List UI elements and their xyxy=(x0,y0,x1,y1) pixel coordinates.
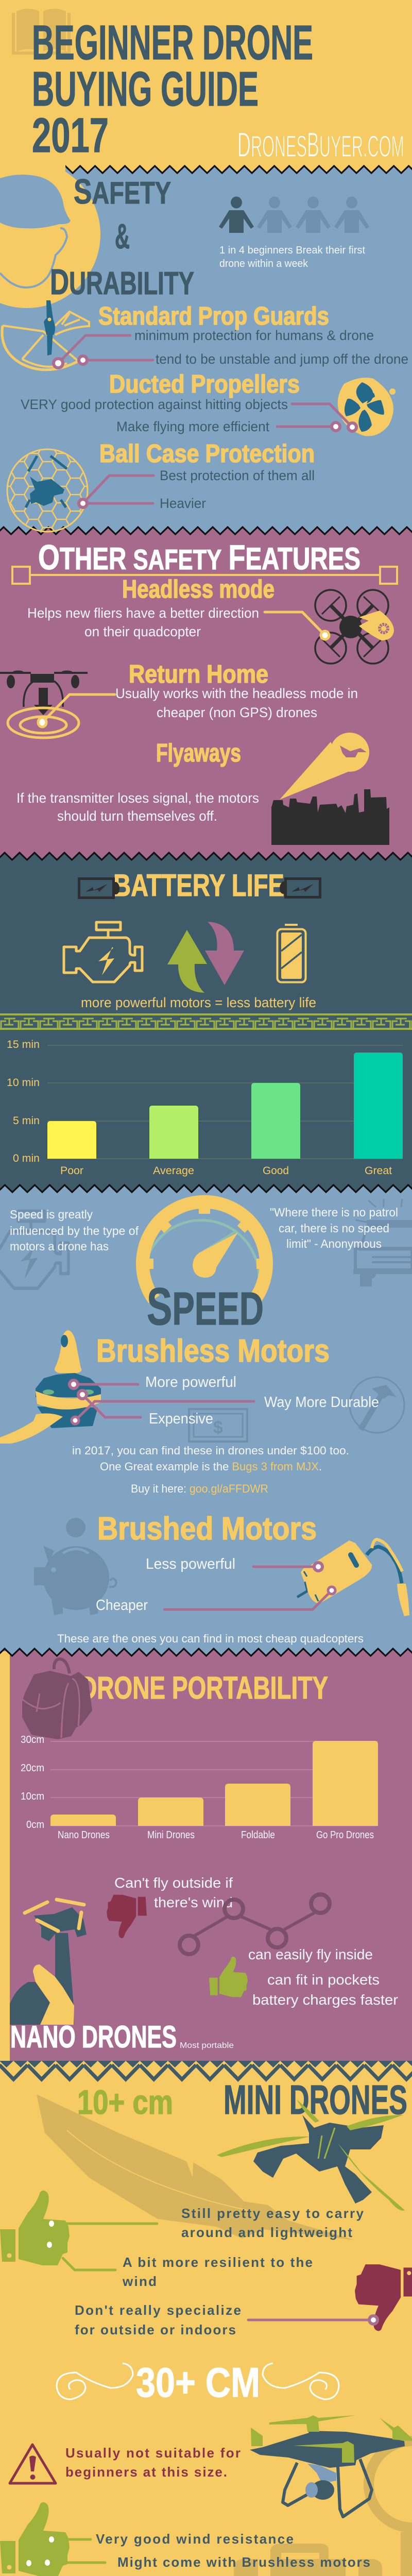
callout: ball heavier: Heavier xyxy=(160,496,206,511)
icon: brushed motor xyxy=(297,1539,409,1616)
callout: easy to carry: around and lightweight xyxy=(181,2225,352,2240)
icon: engine xyxy=(64,922,142,982)
icon: green up arrow xyxy=(167,930,207,993)
callout: not specialized xyxy=(75,2302,377,2337)
icon: thumb up xyxy=(209,1957,248,1997)
callout: resilient to wind: wind xyxy=(122,2274,157,2289)
callout: wind weakness xyxy=(114,1875,233,1910)
callout: expensive: Expensive xyxy=(149,1411,213,1427)
callout: ball heavier xyxy=(79,496,206,511)
callout: way more durable: Way More Durable xyxy=(264,1394,379,1411)
icon: thumb down xyxy=(107,1895,147,1938)
text: warning for beginners: Usually not suitable for xyxy=(65,2445,241,2461)
heading: Ball Case Protection: Ball Case Protection xyxy=(99,440,315,468)
callout: return home text: Usually works with the headless mode in xyxy=(115,686,358,701)
callout: ducted protection xyxy=(21,397,356,431)
heading: Safety & Durability: DURABILITY xyxy=(50,262,194,302)
icon: return home drone with target xyxy=(0,671,88,738)
heading: Brushless Motors: Brushless Motors xyxy=(96,1333,330,1369)
text: beginner statistic: 1 in 4 beginners Break their first xyxy=(219,245,365,256)
callout: ducted efficient: Make flying more efficient xyxy=(116,419,269,434)
icon: helmet head in yellow circle xyxy=(0,161,100,308)
bar: Great xyxy=(354,1053,403,1159)
callout: ball best protection: Best protection of them all xyxy=(160,468,315,483)
icon: faded book xyxy=(12,9,71,55)
icon: nano drone on finger xyxy=(10,1900,87,2025)
section background: other safety (mauve) xyxy=(0,526,412,853)
heading: 30+ CM with swirls xyxy=(57,2360,339,2406)
icon: prop guard xyxy=(2,300,89,370)
bar chart: flight time xyxy=(7,1039,403,1177)
callout: ducted protection: VERY good protection against hitting objects xyxy=(21,397,288,412)
icon: mauve down arrow xyxy=(205,922,244,985)
text: warning for beginners: beginners at this size. xyxy=(65,2464,227,2480)
section background: size classes (yellow) xyxy=(0,2061,412,2576)
heading: Standard Prop Guards: Standard Prop Guards xyxy=(98,302,329,330)
callout: prop guard protection: minimum protection for humans & drone xyxy=(134,328,374,343)
bar: Nano Drones xyxy=(50,1815,116,1826)
heading: Other safety Features: OTHER SAFETY FEATURES xyxy=(38,538,360,577)
text: flyaways description xyxy=(16,790,259,824)
heading: Return Home: Return Home xyxy=(129,660,268,688)
text: speed intro: motors a drone has xyxy=(10,1240,109,1253)
label: 10+ cm: 10+ cm xyxy=(77,2083,173,2121)
callout: wind resistance: Very good wind resistance xyxy=(96,2531,294,2547)
faded icon: feather xyxy=(37,2094,355,2240)
callout: return home text xyxy=(38,686,358,727)
callout: wind weakness: Can't fly outside if xyxy=(114,1875,233,1891)
bar chart: drone size: Nano Drones xyxy=(58,1829,110,1841)
faded icon: line graph xyxy=(180,1894,330,1954)
icon: thumb up (large drone pros) xyxy=(0,2502,70,2576)
text: beginner statistic: drone within a week xyxy=(219,258,308,269)
callout: cheaper xyxy=(96,1587,335,1614)
faded icon: backpack xyxy=(22,1659,92,1739)
faded icon: hammer xyxy=(350,1377,404,1433)
text: Bugs 3 recommendation: One Great example is the Bugs 3 from MJX. xyxy=(100,1460,322,1473)
icon: thumb up (mini pros) xyxy=(0,2191,70,2265)
bar chart: flight time: 5 min xyxy=(13,1115,40,1127)
faded icon: suitcase xyxy=(226,2532,412,2576)
callout: headless mode text: on their quadcopter xyxy=(84,624,201,639)
text: speed intro xyxy=(10,1208,139,1253)
callout: easy to carry xyxy=(67,2206,364,2240)
heading: Nano Drones: NANO DRONES xyxy=(10,2020,177,2054)
text: brushed motors note: These are the ones you can find in most cheap quadcopters xyxy=(57,1632,364,1645)
faded icon: piggy bank xyxy=(34,1518,116,1615)
heading: Safety & Durability: & xyxy=(115,217,130,256)
text: Bugs 3 recommendation xyxy=(72,1444,349,1495)
callout: return home text: cheaper (non GPS) drones xyxy=(157,705,317,720)
callout: resilient to wind: A bit more resilient to the xyxy=(123,2255,313,2270)
icon: battery left xyxy=(79,879,119,897)
text: flyaways description: should turn themselves off. xyxy=(57,808,217,824)
bar chart: flight time: Great xyxy=(365,1165,392,1177)
section background: title (yellow) xyxy=(0,0,412,180)
section background: safety left xyxy=(0,180,65,527)
callout: less powerful xyxy=(146,1556,322,1572)
callout: not specialized: for outside or indoors xyxy=(75,2322,236,2337)
callout: easy to carry: Still pretty easy to carry xyxy=(181,2206,364,2221)
heading: Headless mode: Headless mode xyxy=(122,575,274,603)
text: warning for beginners xyxy=(65,2445,241,2480)
text: speed quote: limit" - Anonymous xyxy=(286,1237,382,1250)
bar chart: drone size: Mini Drones xyxy=(147,1829,195,1841)
bar chart: flight time: 10 min xyxy=(7,1077,40,1089)
title xyxy=(32,15,313,163)
heading: Flyaways: Flyaways xyxy=(156,739,241,767)
bar chart: drone size: Go Pro Drones xyxy=(316,1829,374,1841)
bar chart: drone size: 10cm xyxy=(21,1791,44,1802)
bar: Poor xyxy=(47,1121,96,1159)
yellow stripe: left edge of portability xyxy=(0,1651,10,2061)
text: speed intro: influenced by the type of xyxy=(10,1224,139,1238)
heading: 30+ CM with swirls: 30+ CM xyxy=(136,2360,260,2406)
text: speed intro: Speed is greatly xyxy=(10,1208,93,1221)
callout: headless mode text: Helps new fliers have a better direction xyxy=(27,605,259,621)
icon: brushless motor xyxy=(0,1330,101,1444)
text: speed quote: "Where there is no patrol xyxy=(270,1206,398,1219)
heading: Drone Portability: DRONE PORTABILITY xyxy=(80,1670,328,1705)
title: 2017 xyxy=(32,108,109,163)
heading underline with square ends xyxy=(12,567,397,584)
text: more powerful motors: more powerful motors = less battery life xyxy=(81,995,316,1010)
bar: Foldable xyxy=(225,1784,290,1826)
heading: Battery Life: BATTERY LIFE xyxy=(113,868,284,903)
text: nano pros: battery charges faster xyxy=(252,1992,398,2008)
section background: portability (mauve) xyxy=(0,1648,412,2061)
text: nano pros: can easily fly inside xyxy=(248,1946,373,1962)
faded icon: engine xyxy=(0,1211,68,1289)
text: speed quote: car, there is no speed xyxy=(279,1222,389,1235)
text: nano pros xyxy=(248,1946,398,2008)
bar chart: flight time: 0 min xyxy=(13,1153,40,1164)
icon group: people statistic 1 in 4 xyxy=(219,197,369,233)
section background: battery (slate) xyxy=(0,852,412,1185)
icon: warning triangle xyxy=(10,2445,56,2483)
callout: wind weakness: there's wind xyxy=(154,1894,233,1910)
text: most portable: Most portable xyxy=(180,2041,234,2050)
heading: Brushed Motors: Brushed Motors xyxy=(97,1511,317,1547)
section background: speed (blue) xyxy=(0,1184,412,1649)
bar: Good xyxy=(251,1083,300,1159)
heading: Speed: SPEED xyxy=(147,1277,264,1336)
faded icon: clock xyxy=(369,2441,412,2528)
bar chart: flight time: Good xyxy=(263,1165,289,1177)
text: flyaways description: If the transmitter loses signal, the motors xyxy=(16,790,259,806)
faded icon: money: $ xyxy=(213,1418,223,1437)
heading: Safety & Durability: SAFETY xyxy=(74,172,171,211)
text: nano pros: can fit in pockets xyxy=(267,1972,380,1988)
icon: ball case drone xyxy=(7,449,88,532)
icon: battery right xyxy=(280,879,320,897)
icon: ducted propeller xyxy=(338,378,396,436)
bar: Mini Drones xyxy=(138,1798,203,1826)
callout: headless mode text xyxy=(27,605,329,639)
bar: Go Pro Drones xyxy=(313,1741,378,1826)
callout: prop guard protection xyxy=(54,328,374,368)
icon: thumb down (mini cons) xyxy=(355,2264,412,2331)
bar chart: drone size: 20cm xyxy=(21,1762,44,1774)
icon: headless drone xyxy=(315,590,394,664)
callout: not specialized: Don't really specialize xyxy=(75,2302,241,2318)
bar chart: drone size: Foldable xyxy=(241,1829,275,1841)
bar chart: drone size xyxy=(21,1734,378,1841)
callout: resilient to wind xyxy=(63,2255,313,2289)
bar chart: drone size: 30cm xyxy=(21,1734,44,1745)
heading: Ducted Propellers: Ducted Propellers xyxy=(109,370,300,398)
faded icon: money xyxy=(189,1409,247,1442)
icon: drone signal over city xyxy=(271,733,389,845)
text: beginner statistic xyxy=(219,245,365,269)
callout: more powerful xyxy=(70,1374,236,1391)
callout: prop guard unstable: tend to be unstable and jump off the drone xyxy=(156,351,408,367)
bar chart: flight time: Poor xyxy=(60,1165,83,1177)
text: speed quote xyxy=(270,1206,398,1250)
callout: brushless motors: Might come with Brushless motors xyxy=(117,2554,370,2570)
text: Bugs 3 recommendation: in 2017, you can find these in drones under $100 too. xyxy=(72,1444,349,1457)
text: Bugs 3 recommendation: Buy it here: goo.gl/aFFDWR xyxy=(131,1482,268,1495)
callout: ball best protection xyxy=(83,468,315,503)
bar chart: flight time: 15 min xyxy=(7,1039,40,1050)
heading: Safety & Durability xyxy=(50,172,194,302)
icon: mini drone xyxy=(217,2099,405,2211)
bar chart: drone size: 0cm xyxy=(26,1819,44,1831)
callout: way more durable xyxy=(72,1394,379,1424)
faded icon: police car xyxy=(353,1199,412,1286)
section background: safety (blue) xyxy=(65,165,412,527)
callout: more powerful: More powerful xyxy=(145,1374,236,1391)
bar chart: flight time: Average xyxy=(153,1165,194,1177)
bar: Average xyxy=(149,1106,198,1159)
title: BUYING GUIDE xyxy=(32,62,259,116)
icon: speedometer xyxy=(143,1200,266,1299)
callout: expensive xyxy=(78,1391,213,1427)
callout: cheaper: Cheaper xyxy=(96,1597,148,1614)
icon: battery low xyxy=(277,924,306,982)
callout: less powerful: Less powerful xyxy=(146,1556,235,1572)
icon: large camera drone xyxy=(250,2415,412,2517)
